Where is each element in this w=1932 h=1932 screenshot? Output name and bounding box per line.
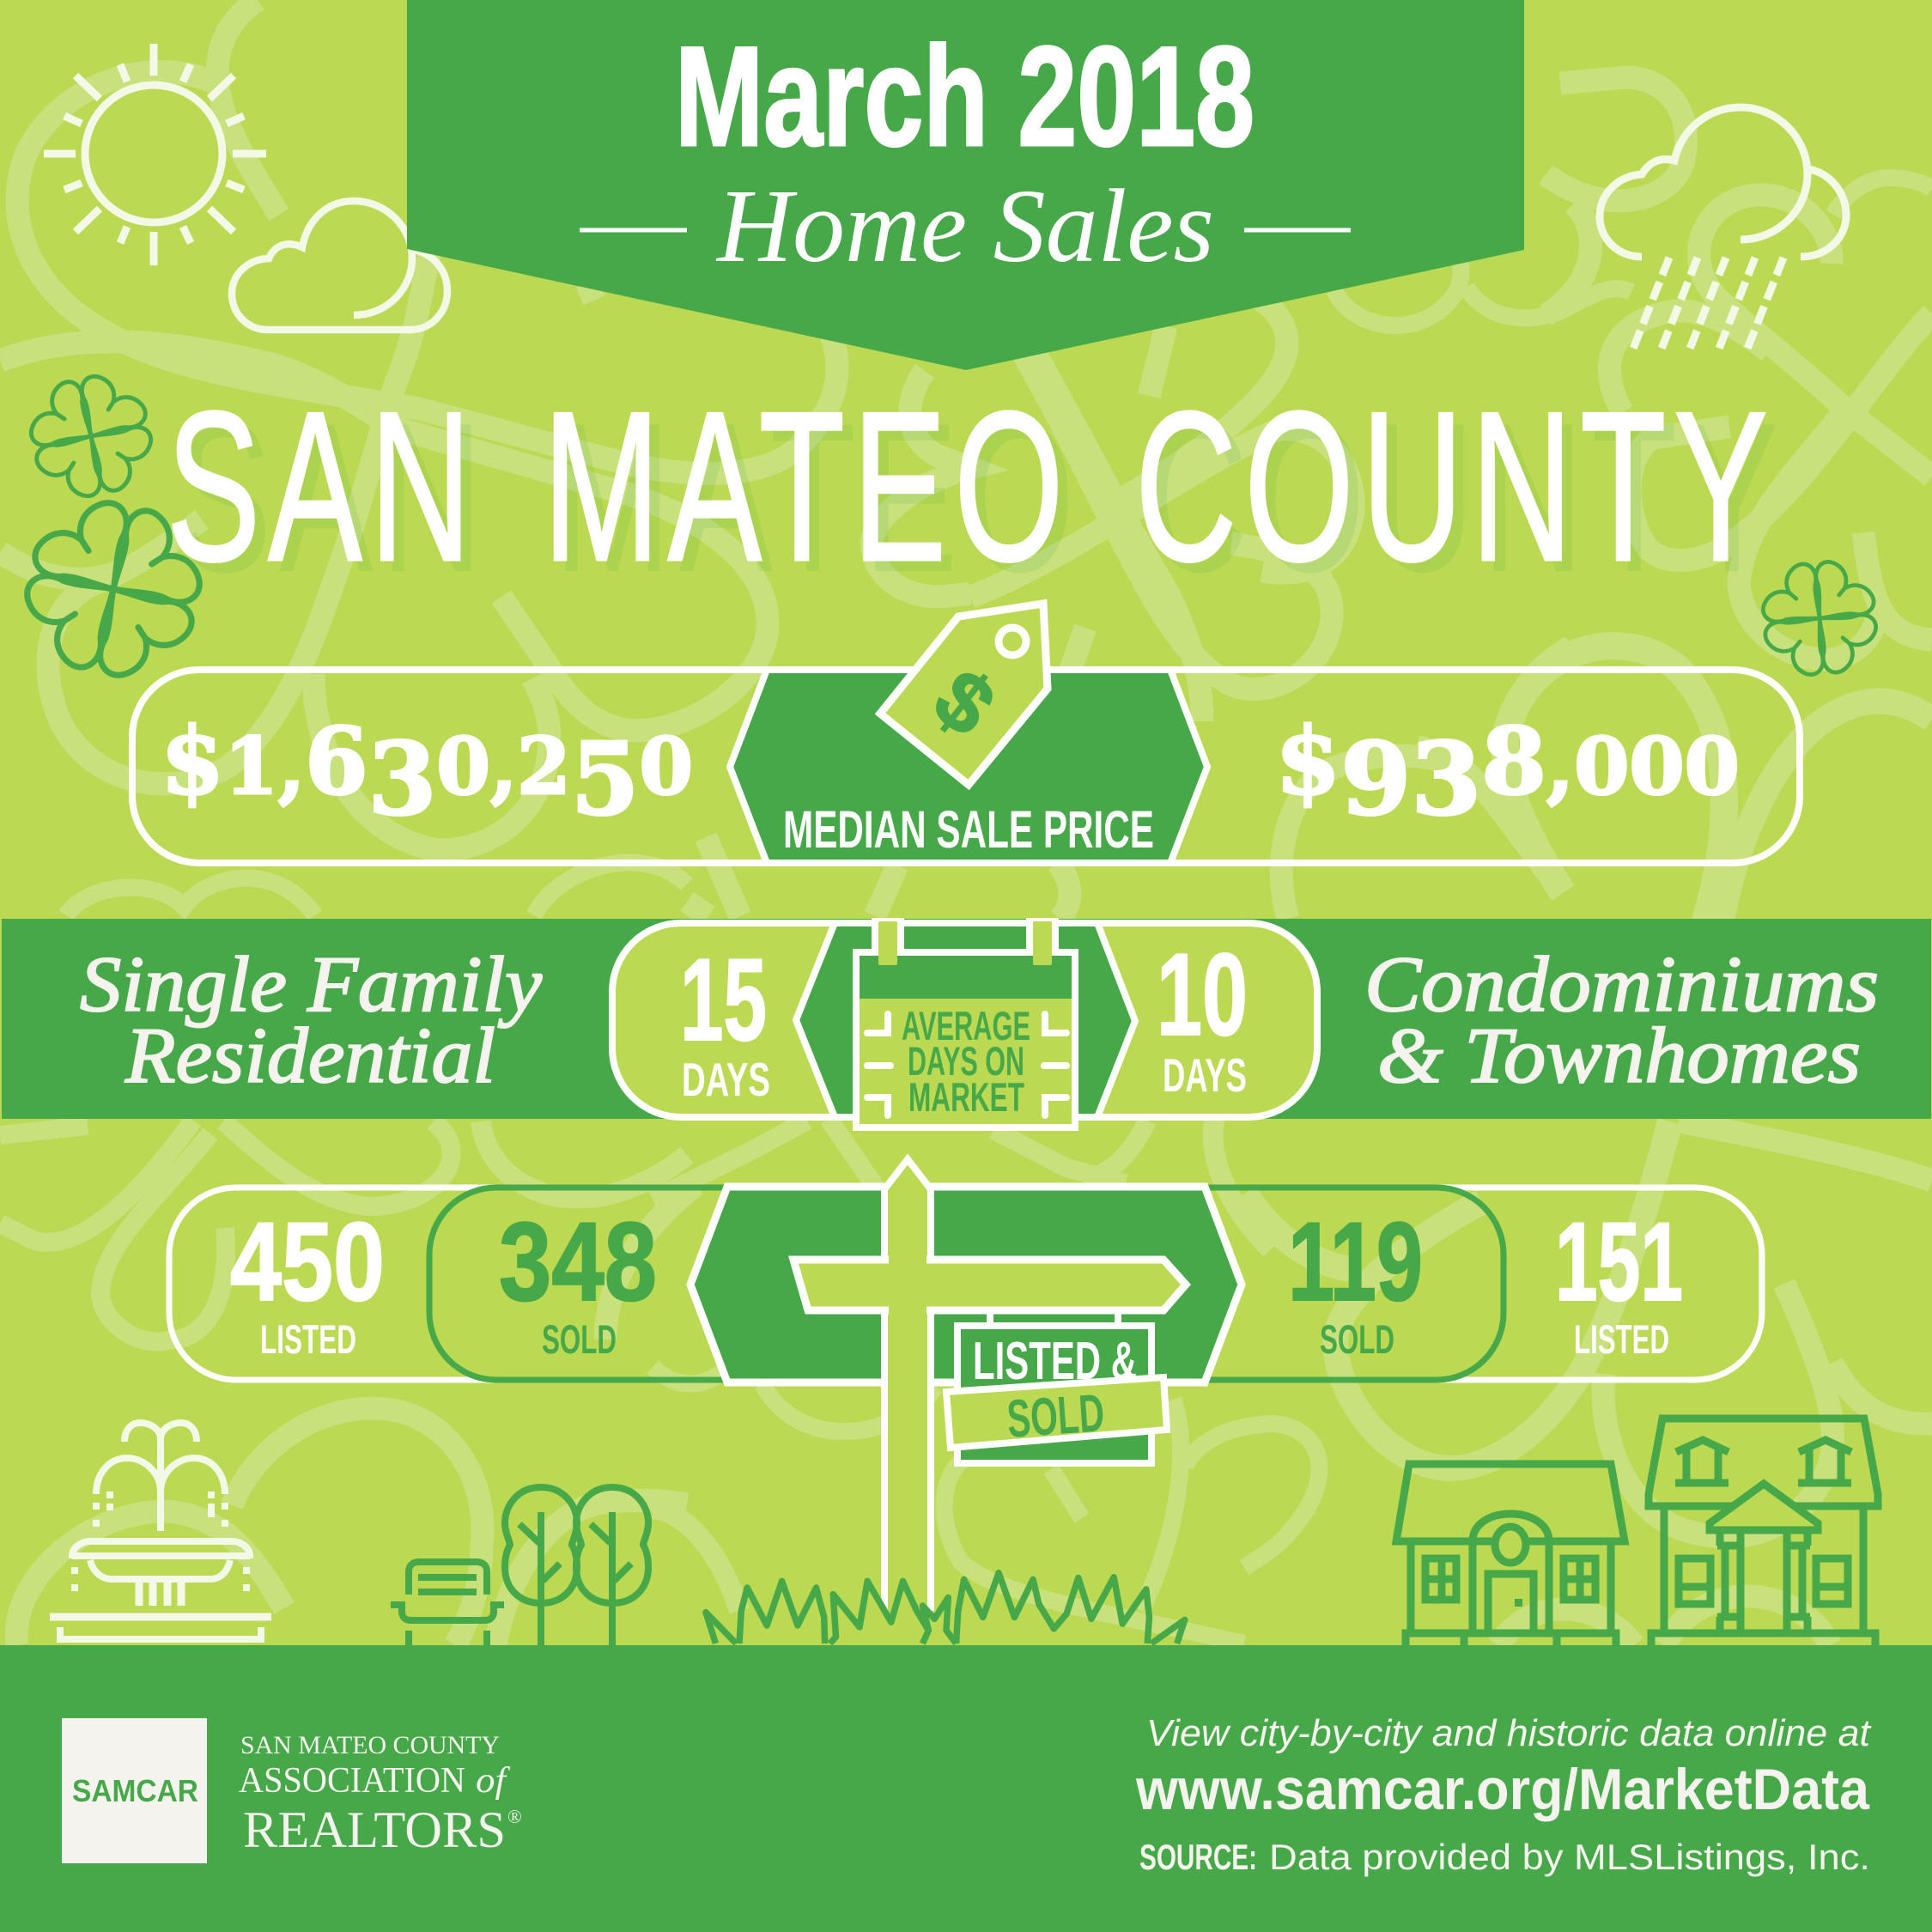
hexagon: median sale price — [730, 670, 1207, 863]
logo: SAMCAR: SAMCAR — [72, 1773, 198, 1808]
value: 151 listed — [1555, 1199, 1683, 1362]
value: 151 listed: 151 — [1555, 1199, 1683, 1324]
icon: small house — [1396, 1464, 1625, 1645]
label: median sale price: MEDIAN SALE PRICE — [783, 800, 1154, 859]
website url: www.samcar.org/MarketData — [1135, 1757, 1870, 1822]
plank — [946, 1377, 1167, 1448]
value: 348 sold: 348 — [499, 1199, 657, 1324]
value: 10 days — [1157, 929, 1248, 1102]
title: March 2018: March 2018 — [675, 17, 1255, 175]
subtitle dashes — [580, 228, 1351, 232]
value: 10 days: 10 — [1157, 929, 1248, 1060]
value: condo median price: 9 — [1340, 721, 1411, 838]
value: 10 days: DAYS — [1163, 1048, 1247, 1102]
icon: bench — [391, 1562, 504, 1645]
organisation name: ASSOCIATION — [239, 1761, 465, 1801]
value: 348 sold: SOLD — [542, 1316, 617, 1362]
icon: cloud — [232, 201, 447, 330]
source line: SOURCE: — [1139, 1837, 1257, 1877]
value: 151 listed: LISTED — [1574, 1316, 1669, 1362]
value: 15 days: DAYS — [682, 1053, 770, 1106]
icon: calendar: DAYS ON — [908, 1038, 1024, 1084]
label: condominiums and townhomes — [1364, 940, 1879, 1099]
icon: calendar — [856, 921, 1075, 1127]
value: condo median price: $ — [1275, 708, 1340, 816]
label: single family residential — [80, 940, 542, 1099]
value: condo median price: 8 — [1481, 708, 1546, 816]
organisation name: REALTORS — [243, 1801, 506, 1858]
label: single family residential: Residential — [125, 1012, 495, 1099]
hexagon: sign backdrop — [690, 1187, 1242, 1382]
panel: listed and sold — [169, 1159, 1762, 1613]
capsule: sold — [429, 1188, 1504, 1380]
value: 119 sold: 119 — [1288, 1199, 1423, 1324]
header banner — [407, 0, 1524, 370]
icon: large clover — [4, 480, 222, 698]
source line: Data provided by MLSListings, Inc. — [1269, 1837, 1870, 1877]
label: condominiums and townhomes: & Townhomes — [1377, 1012, 1861, 1099]
call to action: View city-by-city and historic data online at — [1146, 1712, 1872, 1754]
icon: small clover top-left — [15, 361, 167, 512]
value: 348 sold — [499, 1199, 657, 1362]
value: 119 sold: SOLD — [1320, 1316, 1394, 1362]
icon: rain cloud — [1600, 107, 1846, 349]
value: 450 listed — [230, 1199, 385, 1362]
footer band — [0, 1645, 1932, 1932]
icon: small clover right — [1746, 544, 1893, 692]
icon: price tag — [880, 604, 1048, 785]
sign text: listed and: LISTED & — [973, 1332, 1137, 1391]
icon: large house — [1649, 1419, 1878, 1645]
logo: SAMCAR — [62, 1718, 207, 1863]
organisation name: SAN MATEO COUNTY — [240, 1731, 500, 1759]
organisation name — [239, 1731, 522, 1858]
value: 450 listed: 450 — [230, 1199, 385, 1324]
value: single family median price: 0 — [639, 721, 693, 812]
value: 450 listed: LISTED — [260, 1316, 356, 1362]
county heading: SAN MATEO COUNTY — [167, 368, 1776, 605]
icon: calendar: MARKET — [908, 1074, 1024, 1120]
panel: average days on market — [2, 919, 1931, 1127]
value: 119 sold — [1288, 1199, 1423, 1362]
value: condo median price: ,000 — [1546, 721, 1737, 812]
panel: median sale price — [132, 604, 1800, 863]
county heading: SAN MATEO COUNTY — [178, 379, 1787, 617]
value: single family median price: $1,6 — [161, 708, 369, 816]
subtitle: Home Sales: Home Sales — [715, 168, 1214, 284]
value: 15 days: 15 — [680, 934, 767, 1065]
label: condominiums and townhomes: Condominiums — [1364, 940, 1879, 1028]
sign text: sold: SOLD — [1005, 1383, 1106, 1449]
value: single family median price: 5 — [571, 721, 639, 838]
icon: grass — [706, 1573, 1185, 1643]
icon: fountain — [50, 1423, 271, 1639]
icon: signpost — [793, 1159, 1186, 1613]
hanging sign — [957, 1326, 1151, 1463]
value: single family median price: 0,2 — [436, 721, 571, 812]
value: 15 days — [680, 934, 770, 1106]
icon: trees — [505, 1487, 648, 1645]
hexagon — [796, 923, 1135, 1117]
icon: sun — [44, 44, 266, 265]
icon: price tag: $ — [917, 651, 1012, 754]
capsule — [612, 923, 1317, 1117]
label: single family residential: Single Family — [80, 940, 542, 1028]
value: single family median price: 3 — [368, 721, 436, 838]
organisation name: ® — [507, 1806, 522, 1827]
value: condo median price: 3 — [1411, 721, 1481, 838]
organisation name: of — [476, 1761, 511, 1801]
icon: calendar: AVERAGE — [902, 1003, 1030, 1048]
